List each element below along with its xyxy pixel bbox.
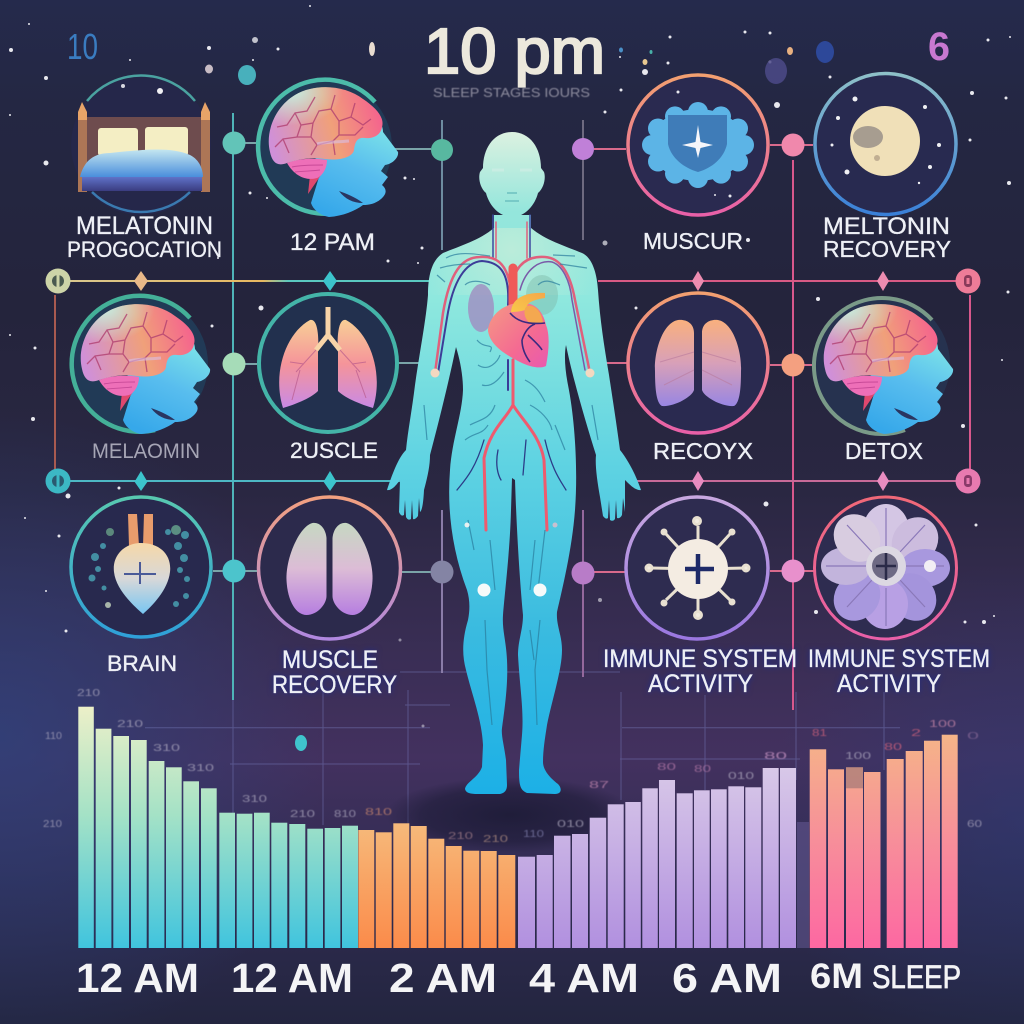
time axis labels: 2 AM (389, 955, 497, 1001)
blood vessels (435, 215, 590, 530)
panel: immune cell icon (626, 497, 768, 639)
bar value labels: 0 (967, 731, 980, 742)
bar value labels: 310 (187, 763, 215, 774)
label: melaomin: MELAOMIN (92, 440, 200, 463)
panel: brain icon 12 PAM (258, 80, 398, 217)
label: muscle recovery: RECOVERY (272, 671, 397, 699)
label: muscur: MUSCUR (643, 228, 743, 254)
chart grid lines (145, 672, 900, 830)
bar value labels: 110 (45, 731, 62, 742)
label: meltonin recovery (823, 213, 951, 262)
label: melatonin production: PROGOCATION (67, 237, 222, 262)
label: melatonin production: MELATONIN (76, 212, 213, 240)
subtitle: SLEEP STAGES IOURS (433, 85, 590, 100)
face (492, 168, 532, 172)
label: meltonin recovery: MELTONIN (823, 213, 950, 240)
time axis labels: 12 AM (76, 955, 199, 1001)
label: muscle recovery: MUSCLE (282, 646, 378, 674)
panel: bed icon (71, 75, 211, 215)
label: melatonin production (67, 212, 222, 262)
orange bars (358, 823, 515, 948)
label: immune system activity right (808, 645, 990, 698)
time axis labels: SLEEP (872, 959, 961, 995)
label: brain: BRAIN (107, 651, 177, 676)
connector lines (55, 113, 970, 710)
bar value labels: 80 (657, 762, 677, 773)
panel: heart icon (71, 497, 211, 637)
bar value labels: 210 (483, 834, 509, 845)
timeline node: top row centre left (431, 139, 453, 161)
timeline node: bottom row left (222, 560, 246, 582)
teal bars (78, 707, 358, 948)
capillaries (424, 254, 598, 725)
bar value labels: 210 (290, 809, 316, 820)
timeline node: bottom row right (782, 560, 804, 582)
panel: muscle shield icon (628, 75, 768, 215)
time axis labels: 12 AM (231, 955, 353, 1001)
bar value labels: 2 (911, 728, 922, 739)
time axis labels (76, 955, 961, 1001)
label: muscle recovery (272, 646, 397, 699)
lung patch (468, 284, 494, 332)
bar value labels: 810 (334, 809, 357, 820)
timeline node: top row right (782, 134, 804, 156)
joints (430, 368, 440, 378)
time axis labels: 4 AM (529, 955, 639, 1001)
bar value labels: 81 (812, 728, 828, 739)
timeline node: middle row left (222, 352, 246, 376)
bar value labels: 310 (153, 743, 181, 754)
timeline node: bottom row centre left (430, 560, 454, 584)
bar value labels: 87 (589, 780, 610, 791)
diamond markers (134, 271, 889, 491)
purple bars (518, 768, 796, 948)
timeline node: bottom row centre right (572, 562, 594, 584)
label: 2uscle: 2USCLE (290, 438, 378, 463)
label: detox: DETOX (845, 438, 923, 464)
bar value labels: 80 (764, 751, 788, 762)
ring node: lower right (956, 468, 980, 494)
label: immune system activity: ACTIVITY (648, 670, 753, 698)
title: 10 pm (424, 15, 605, 87)
bar chart (78, 707, 958, 948)
figure shadow platform (385, 777, 635, 853)
bar value labels: 210 (77, 688, 101, 699)
bar value labels: 110 (523, 829, 545, 840)
label: recoyx: RECOYX (653, 438, 753, 464)
label: immune system activity right: ACTIVITY (837, 670, 941, 698)
panel: moon icon (815, 74, 956, 214)
label: 12 PAM: 12 PAM (290, 229, 375, 256)
bar value labels: 210 (117, 719, 144, 730)
bar value labels: 100 (845, 751, 872, 762)
timeline node: top row centre right (572, 138, 594, 160)
timeline node: top row left (222, 132, 246, 154)
heart organ (488, 303, 549, 367)
ring node: lower left (46, 468, 70, 494)
bar value labels: 210 (43, 819, 62, 830)
decorative coloured dots near title (205, 41, 834, 751)
head (479, 132, 545, 217)
panel: brain icon melaomin (72, 296, 210, 434)
time axis labels: 6 AM (672, 955, 782, 1001)
bar value labels: 80 (694, 764, 712, 775)
corner number 6: 6 (928, 25, 950, 69)
bar value labels (43, 688, 983, 845)
gap bar (797, 822, 809, 948)
label: meltonin recovery: RECOVERY (823, 236, 951, 262)
bar value labels: 310 (242, 794, 268, 805)
panel: pale lungs icon (258, 497, 400, 639)
ring node: upper right (956, 268, 980, 294)
bar value labels: 810 (365, 807, 393, 818)
bar value labels: 60 (967, 819, 983, 830)
panel: flower icon (814, 497, 956, 639)
label: immune system activity right: IMMUNE SYSTEM (808, 645, 990, 673)
time axis labels: 6M (810, 957, 863, 996)
bar value labels: 010 (557, 819, 585, 830)
panel: orange lungs icon (628, 293, 768, 433)
bar value labels: 010 (728, 771, 755, 782)
bar value labels: 80 (884, 742, 903, 753)
ring node: upper left (46, 268, 70, 294)
panel: brain icon detox (814, 296, 953, 434)
bar value labels: 210 (448, 831, 474, 842)
label: immune system activity: IMMUNE SYSTEM (603, 645, 797, 673)
corner number 10: 10 (67, 26, 98, 67)
panel: lungs icon with bronchi (259, 294, 397, 432)
body silhouette (387, 215, 641, 794)
bar value labels: 100 (929, 719, 957, 730)
pink bars (810, 735, 958, 948)
label: immune system activity (603, 645, 797, 698)
timeline node: middle row right (782, 354, 804, 376)
human body figure (387, 132, 641, 794)
star field (9, 5, 1011, 728)
